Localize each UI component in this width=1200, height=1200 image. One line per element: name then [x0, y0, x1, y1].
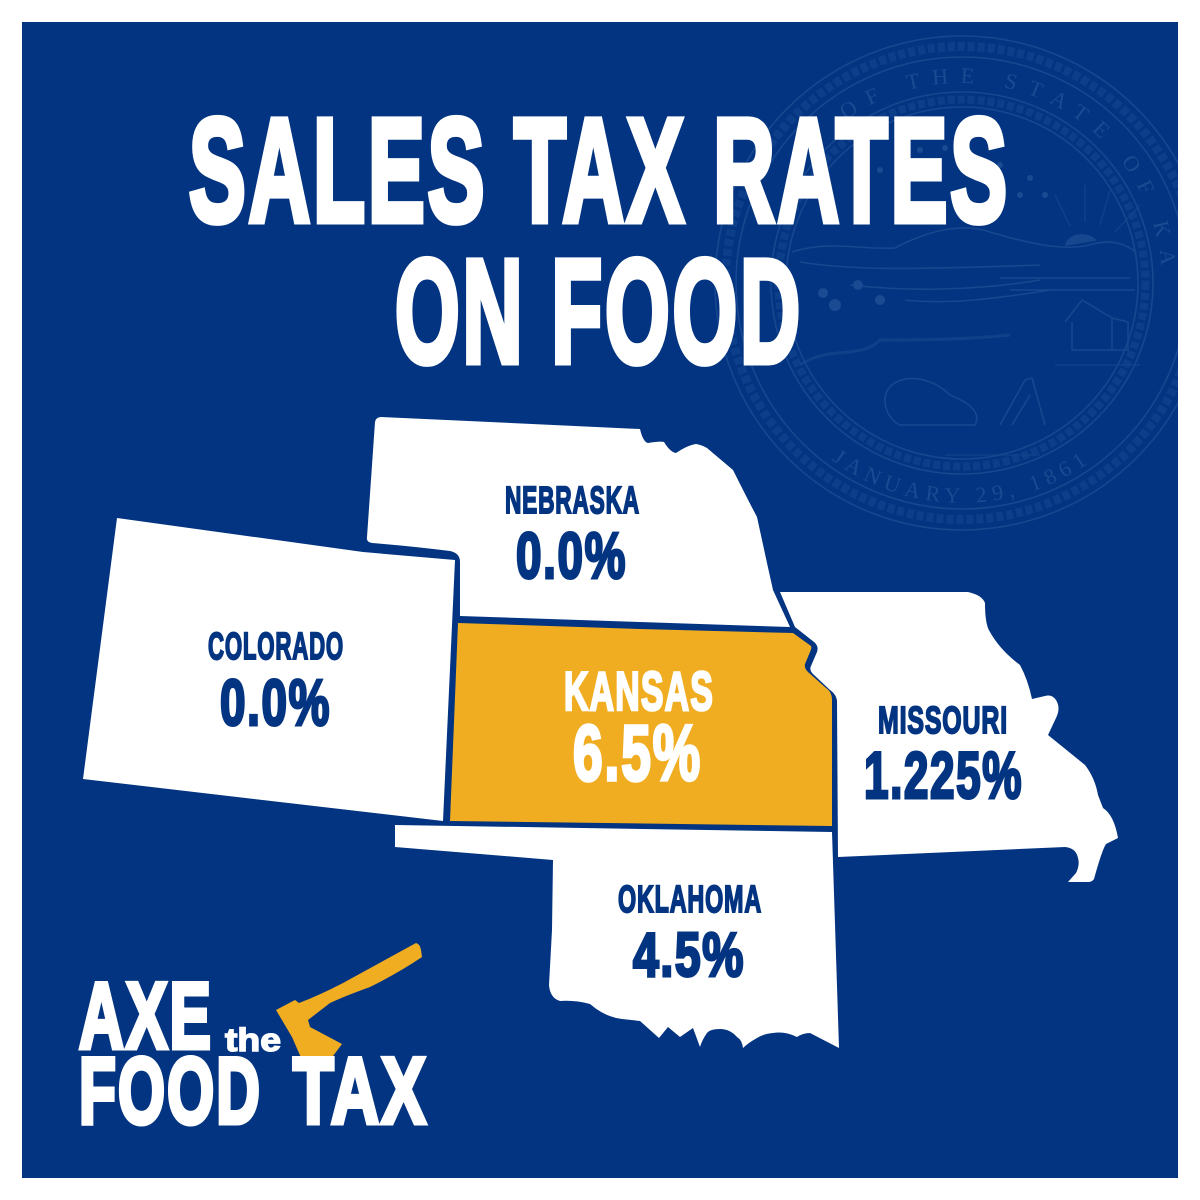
state: Oklahoma: 4.5%: [633, 921, 745, 990]
state: Kansas (highlighted): [450, 623, 832, 826]
state: Missouri: 1.225%: [864, 738, 1023, 812]
logo: Axe the Food Tax: [79, 943, 428, 1143]
state: Colorado: COLORADO: [208, 626, 344, 668]
state: Nebraska: NEBRASKA: [505, 480, 640, 522]
state: Nebraska: 0.0%: [516, 519, 627, 592]
state: Colorado: 0.0%: [220, 666, 331, 739]
state: Kansas (highlighted): 6.5%: [573, 708, 702, 797]
state: Missouri: [780, 592, 1118, 882]
state: Oklahoma: [395, 825, 839, 1048]
state: Colorado: [83, 518, 455, 821]
title: ON FOOD: [395, 230, 803, 394]
state: Missouri: MISSOURI: [878, 700, 1008, 742]
logo: Axe the Food Tax: AXE: [79, 963, 213, 1068]
watermark: Kansas state seal: JANUARY 29, 1861: [832, 450, 1086, 503]
watermark: Kansas state seal: [714, 35, 1178, 531]
logo: Axe the Food Tax: TAX: [293, 1038, 428, 1143]
state: Oklahoma: OKLAHOMA: [618, 879, 762, 921]
logo: Axe the Food Tax: FOOD: [79, 1038, 262, 1143]
state: Nebraska: [367, 417, 790, 627]
title: [189, 89, 1010, 394]
state: Kansas (highlighted): KANSAS: [564, 660, 714, 722]
logo: Axe the Food Tax: the: [225, 1022, 281, 1058]
map of Kansas and neighbouring states: [83, 417, 1118, 1048]
icon: axe: [276, 943, 422, 1060]
